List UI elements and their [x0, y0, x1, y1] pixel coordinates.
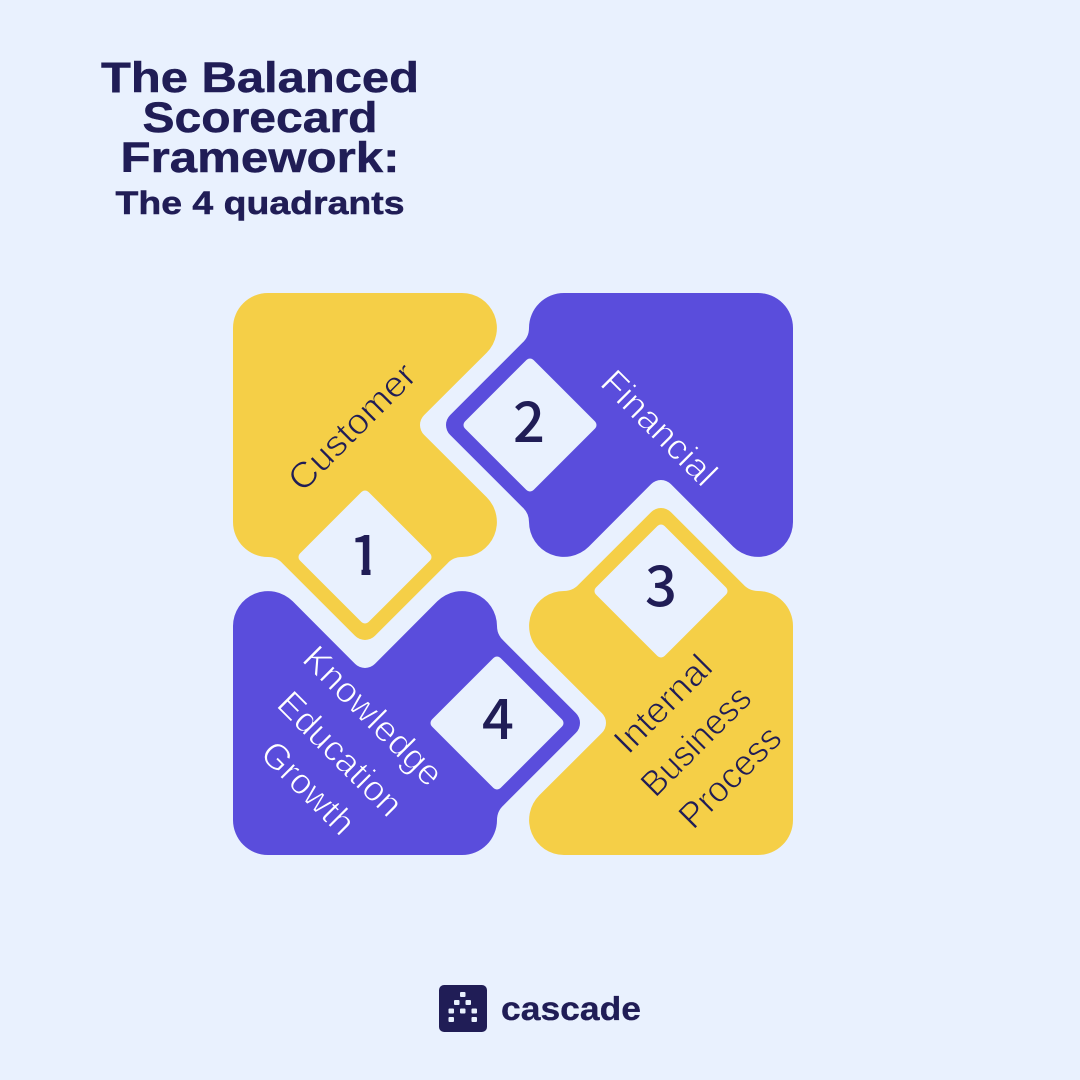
label: Internal Business Process [605, 646, 789, 836]
title: The Balanced [101, 54, 419, 102]
logo: cascade [439, 985, 641, 1032]
label: Knowledge Education Growth: Growth [253, 732, 364, 843]
title: Framework: [120, 134, 400, 182]
label: Internal Business Process: Internal [605, 646, 720, 761]
panel: quadrant 3 internal business process [529, 508, 793, 855]
number diamond 2 [461, 356, 599, 494]
title: The 4 quadrants [116, 185, 404, 221]
label: Knowledge Education Growth: Education [269, 683, 411, 825]
icon: cascade mark [439, 985, 487, 1032]
wordmark: cascade [501, 990, 641, 1027]
number diamond 4: 4 [482, 675, 514, 756]
shape: purple tab pointing right [233, 591, 580, 855]
shape: purple tab pointing left [446, 293, 793, 557]
label: Internal Business Process: Process [670, 717, 789, 836]
label: Knowledge Education Growth [253, 637, 452, 843]
label: Internal Business Process: Business [632, 677, 759, 804]
panel: quadrant 4 knowledge education growth [233, 591, 580, 855]
label: Financial: Financial [593, 361, 726, 494]
number diamond 2: 2 [513, 378, 545, 459]
title [101, 54, 419, 221]
number diamond 3: 3 [645, 542, 677, 623]
shape: yellow tab pointing up [529, 508, 793, 855]
panel: quadrant 2 financial [446, 293, 793, 557]
number diamond 1 [296, 488, 434, 626]
shape: yellow tab pointing down [233, 293, 497, 640]
panel: quadrant 1 customer [233, 293, 497, 640]
number diamond 3 [592, 522, 730, 660]
number diamond 1: 1 [349, 511, 381, 592]
label: Knowledge Education Growth: Knowledge [295, 637, 452, 794]
title: Scorecard [142, 94, 378, 142]
number diamond 4 [428, 654, 566, 792]
label: Customer: Customer [279, 354, 424, 499]
